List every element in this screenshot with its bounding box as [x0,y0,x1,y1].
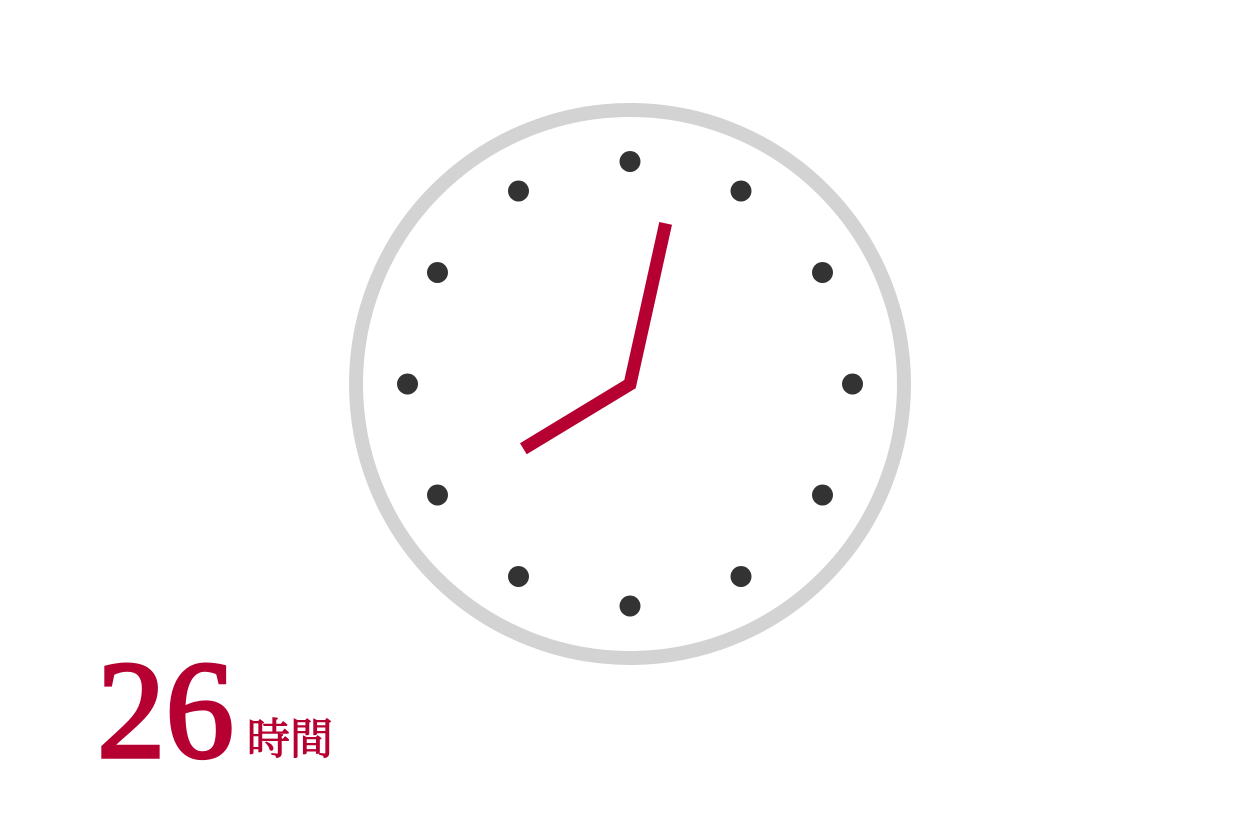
clock hands [520,222,672,454]
clock face ring [356,110,904,658]
label: 26 hours [97,633,333,788]
hour markers [397,151,863,616]
number 26: 26 [97,633,234,788]
unit: hours: 時間 [247,717,333,764]
icon: clock [356,110,904,658]
